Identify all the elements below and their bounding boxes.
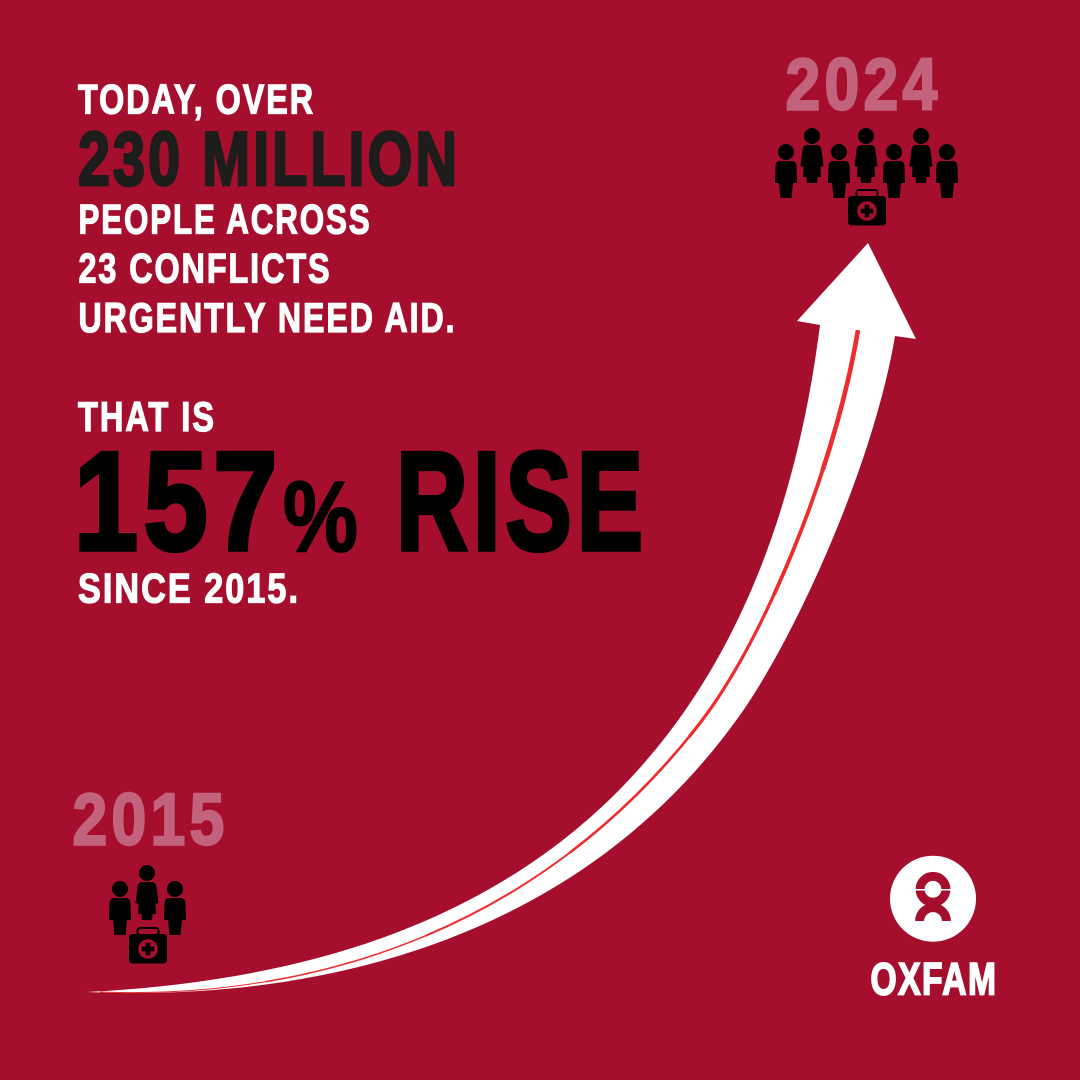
headline number: 230 million: 230 MILLION (78, 117, 460, 202)
headline word: rise: RISE (396, 422, 648, 580)
icon: 2024 medical kit (848, 190, 886, 226)
year label: 2024: 2024 (786, 42, 942, 126)
year label: 2015: 2015 (72, 778, 228, 860)
text block: 157% rise (74, 393, 648, 612)
arrow: rising curve (87, 243, 916, 993)
text: today, over: TODAY, OVER (78, 76, 315, 122)
logo: Oxfam (870, 856, 998, 1004)
logo wordmark: OXFAM (870, 954, 998, 1004)
text: since 2015: SINCE 2015. (78, 564, 300, 612)
logo figure (915, 876, 951, 921)
text: 23 conflicts: 23 CONFLICTS (78, 244, 332, 292)
text block: 230 million people (78, 76, 460, 341)
text: people across: PEOPLE ACROSS (78, 196, 372, 242)
arrow centre line (100, 330, 858, 993)
arrow shaft and head (87, 243, 916, 993)
text: that is: THAT IS (78, 393, 216, 440)
icon: 2024 people group (775, 128, 958, 198)
logo circle (890, 856, 976, 942)
icon: 2015 medical kit (129, 928, 167, 964)
headline number: 157: 157 (74, 422, 283, 580)
percent sign: % (283, 461, 358, 573)
text: urgently need aid: URGENTLY NEED AID. (78, 294, 456, 341)
icon: 2015 people group (109, 865, 186, 935)
